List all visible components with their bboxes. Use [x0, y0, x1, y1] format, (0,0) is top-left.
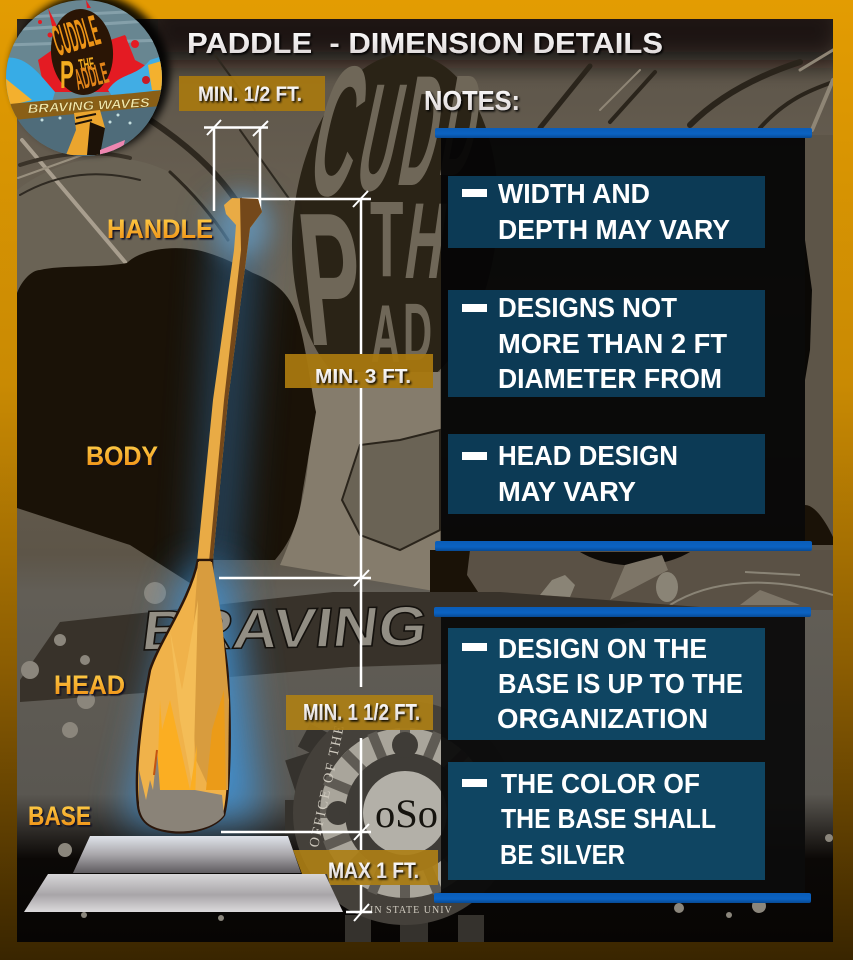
note: color of base [448, 762, 765, 880]
upper step [73, 836, 301, 873]
note: designs diameter: MORE THAN 2 FT [498, 328, 727, 359]
fist silhouette [342, 430, 440, 550]
watermark text: cuddle the paddle: A [371, 289, 400, 380]
note: designs diameter: DIAMETER FROM [498, 363, 722, 394]
title: PADDLE - DIMENSION DETAILS [187, 28, 663, 60]
label: base: BASE [28, 801, 91, 831]
note: color of base: THE BASE SHALL [501, 803, 716, 834]
max 1 ft tag: MAX 1 FT. [328, 858, 419, 883]
logo sky [6, 0, 162, 156]
wall block mid [280, 372, 440, 592]
blue bar top [434, 607, 811, 617]
dimension tag: min 1/2 ft [179, 76, 325, 111]
paddle [137, 198, 262, 832]
watermark text: cuddle the paddle: P [290, 173, 372, 386]
note: color of base: BE SILVER [500, 839, 625, 870]
logo confetti [40, 114, 132, 124]
max 1 ft tag [293, 850, 438, 885]
watermark oval [292, 54, 486, 372]
seal gear teeth [285, 724, 484, 942]
dark band behind BRAVING [20, 592, 700, 702]
notes heading: NOTES: [424, 85, 520, 116]
area between panels [430, 550, 833, 610]
seal OSO mark: oSo [375, 791, 438, 836]
watermark text: cuddle the paddle: D [389, 44, 456, 220]
logo splashes [5, 0, 166, 106]
brush strokes upper left [18, 55, 290, 262]
label: body: BODY [86, 441, 158, 471]
watermark text: cuddle the paddle: D [432, 45, 492, 206]
dimension tag: min 1/2 ft: MIN. 1/2 FT. [198, 83, 302, 106]
watermark text: cuddle the paddle: D [403, 287, 432, 378]
right stone strip [805, 164, 833, 438]
note: width and depth: DEPTH MAY VARY [498, 214, 730, 245]
blue bar bottom [435, 541, 812, 551]
panel backing [441, 135, 805, 545]
lower step [24, 874, 343, 912]
note: head design [448, 434, 765, 514]
watermark text: cuddle the paddle: H [399, 181, 454, 302]
label: head: HEAD [54, 670, 125, 700]
note: design on base [448, 628, 765, 740]
grey splatter [21, 582, 833, 921]
logo fists [66, 110, 105, 155]
label: handle: HANDLE [107, 214, 213, 244]
panel: lower notes [434, 607, 811, 903]
logo banner [10, 90, 162, 120]
watermark text: cuddle the paddle: T [370, 179, 403, 300]
watermark text: cuddle the paddle [300, 66, 479, 354]
paddle blade [137, 560, 230, 832]
note: design on base: ORGANIZATION [497, 703, 708, 734]
silver base [24, 836, 438, 912]
blue bar top [435, 128, 812, 138]
dark silhouette left [17, 248, 316, 585]
panel: upper notes [435, 128, 812, 551]
panel backing [441, 616, 805, 894]
logo wordmark [52, 15, 110, 90]
dimension tag: min 3 ft: MIN. 3 FT. [315, 366, 411, 388]
logo badge [0, 0, 170, 160]
blue glow around paddle [125, 193, 270, 825]
note: color of base: THE COLOR OF [501, 768, 700, 799]
dimension tag: min 1 1/2 ft: MIN. 1 1/2 FT. [303, 699, 420, 725]
note: design on base: DESIGN ON THE [498, 633, 707, 664]
watermark text: cuddle the paddle: U [345, 52, 417, 223]
note: head design: MAY VARY [498, 476, 636, 507]
logo wordmark: THE [77, 53, 96, 76]
note: designs diameter: DESIGNS NOT [498, 292, 677, 323]
seal [285, 704, 484, 942]
dimension tag: min 1 1/2 ft [286, 695, 433, 730]
logo oval [50, 9, 114, 95]
seal: IN STATE UNIV [370, 905, 453, 916]
dimension tag: min 3 ft [285, 354, 433, 388]
seal lettering: OFFICE OF THE [307, 722, 348, 849]
top vignette [150, 8, 840, 60]
seal disc [293, 704, 472, 925]
logo wordmark: CUDDLE [47, 5, 105, 65]
hill shape upper left [17, 158, 262, 290]
note: width and depth [448, 176, 765, 248]
logo tagline: BRAVING WAVES [27, 96, 151, 116]
note: width and depth: WIDTH AND [498, 178, 650, 209]
note: design on base: BASE IS UP TO THE [498, 668, 743, 699]
watermark text: cuddle the paddle: C [296, 28, 383, 235]
note: head design: HEAD DESIGN [498, 440, 678, 471]
watermark: braving lettering: BRAVING [139, 594, 431, 662]
dimension lines [204, 120, 372, 921]
logo shadow [10, 0, 170, 154]
logo wordmark: P [60, 53, 74, 97]
logo wordmark: ADDLE [71, 56, 112, 97]
brush strokes upper right [540, 50, 833, 130]
paddle shaft and handle [197, 198, 262, 562]
blue bar bottom [434, 893, 811, 903]
note: designs diameter [448, 290, 765, 397]
